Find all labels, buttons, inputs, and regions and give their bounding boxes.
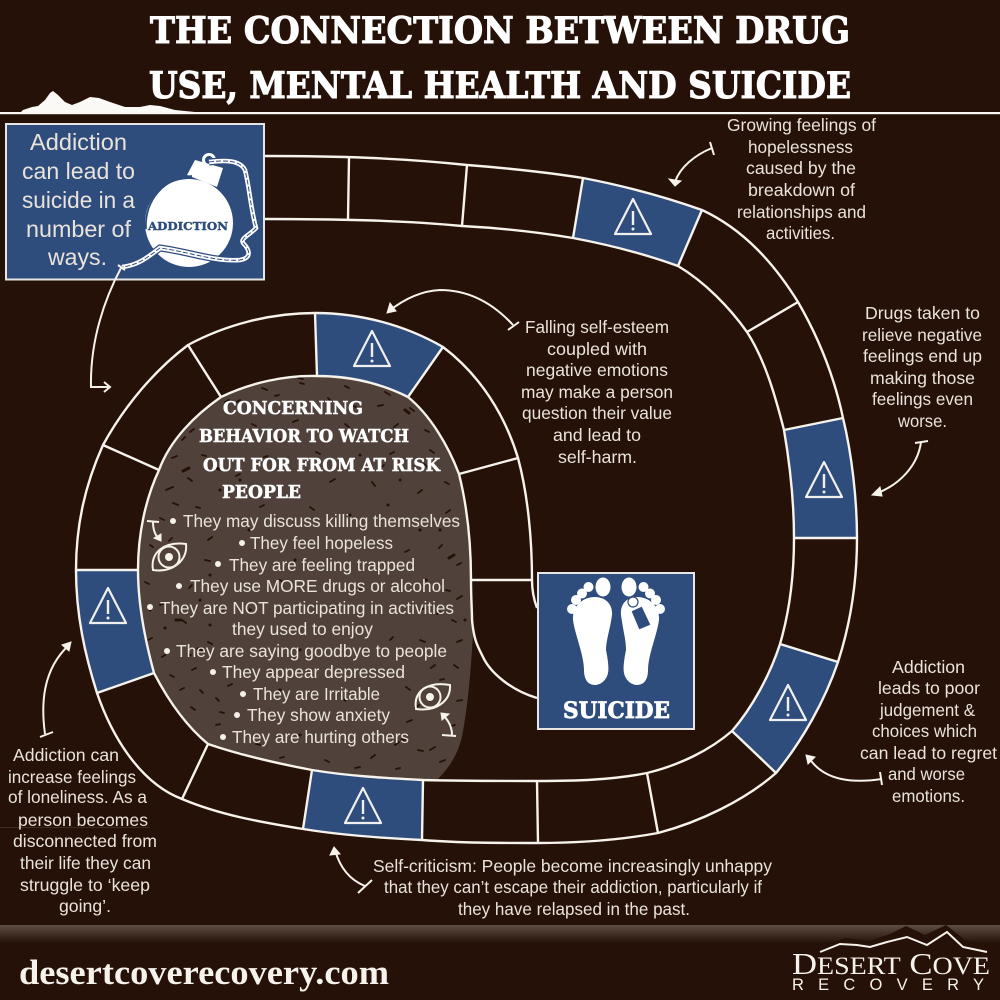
callout: loneliness: person becomes bbox=[18, 810, 148, 830]
icon: bomb with chain: ADDICTION bbox=[147, 220, 228, 233]
box text: number of bbox=[26, 216, 131, 242]
behavior list: They are hurting others bbox=[232, 727, 409, 747]
callout: poor judgement: can lead to regret bbox=[860, 743, 997, 763]
behavior list: They appear depressed bbox=[222, 662, 405, 682]
concerning behavior blob panel bbox=[138, 376, 473, 780]
board: warning squares bbox=[76, 178, 857, 840]
arrow: loneliness bbox=[40, 642, 71, 737]
callout: loneliness: of loneliness. As a bbox=[8, 787, 147, 807]
callout: self-esteem: may make a person bbox=[521, 382, 673, 402]
callout: self-esteem: coupled with bbox=[547, 339, 647, 359]
behavior list: They are Irritable bbox=[253, 684, 380, 704]
title: THE CONNECTION BETWEEN DRUG bbox=[150, 10, 850, 52]
callout: self-esteem: Falling self-esteem bbox=[525, 317, 669, 337]
icon: warning triangle 4 bbox=[345, 788, 381, 823]
logo: desert cove recovery: DESERT COVE bbox=[792, 946, 990, 981]
callout: poor judgement: emotions. bbox=[892, 786, 965, 806]
callout: loneliness bbox=[8, 745, 157, 916]
callout: loneliness: their life they can bbox=[20, 853, 151, 873]
icon: warning triangle 5 bbox=[90, 588, 126, 623]
panel: suicide box bbox=[538, 573, 694, 729]
logo: desert cove recovery: RECOVERY bbox=[792, 976, 984, 994]
arrow: self-criticism bbox=[330, 847, 372, 893]
behavior list: They feel hopeless bbox=[250, 533, 393, 553]
callout: loneliness: struggle to ‘keep bbox=[20, 875, 150, 895]
callout: drugs taken: feelings even bbox=[872, 389, 973, 409]
behavior list bbox=[147, 511, 460, 747]
header mountain rule bbox=[0, 91, 1000, 114]
callout: self-criticism bbox=[373, 856, 772, 919]
icon: bomb with chain bbox=[122, 154, 256, 267]
callout: hopelessness: caused by the bbox=[746, 158, 856, 178]
behavior list: they used to enjoy bbox=[232, 619, 373, 639]
blob heading: OUT FOR FROM AT RISK bbox=[203, 456, 441, 476]
blob heading bbox=[199, 399, 441, 503]
arrow: to left eye bbox=[147, 521, 161, 541]
callout: loneliness: going’. bbox=[59, 896, 111, 916]
title bbox=[149, 10, 851, 107]
box text: can lead to bbox=[22, 158, 135, 184]
behavior list: They may discuss killing themselves bbox=[183, 511, 460, 531]
board: winding track outline bbox=[76, 156, 857, 843]
callout: loneliness: increase feelings bbox=[8, 767, 136, 787]
callout: drugs taken: relieve negative bbox=[862, 325, 982, 345]
callout: hopelessness: hopelessness bbox=[748, 137, 853, 157]
callout: poor judgement: Addiction bbox=[892, 657, 965, 677]
blob heading: PEOPLE bbox=[222, 483, 301, 503]
box text bbox=[22, 129, 136, 270]
callout: hopelessness: activities. bbox=[766, 223, 835, 243]
behavior list: They are saying goodbye to people bbox=[176, 641, 447, 661]
logo: desert cove recovery bbox=[792, 932, 990, 994]
callout: self-esteem bbox=[521, 317, 673, 467]
box text: suicide in a bbox=[22, 187, 136, 213]
arrow: drugs taken bbox=[872, 441, 928, 496]
behavior list: They are NOT participating in activities bbox=[160, 598, 454, 618]
icon: left foot bbox=[567, 578, 612, 685]
callout: poor judgement: judgement & bbox=[879, 700, 975, 720]
arrow: to right eye bbox=[441, 713, 456, 736]
callout: poor judgement bbox=[860, 657, 997, 806]
behavior list: They show anxiety bbox=[247, 705, 390, 725]
callout: self-esteem: self-harm. bbox=[558, 447, 637, 467]
callout: hopelessness: relationships and bbox=[737, 202, 866, 222]
arrow: hopelessness bbox=[669, 142, 714, 186]
box text: ways. bbox=[47, 244, 107, 270]
website url: desertcoverecovery.com bbox=[19, 953, 389, 992]
arrow: box to track bbox=[91, 265, 125, 392]
callout: poor judgement: choices which bbox=[872, 721, 977, 741]
title: USE, MENTAL HEALTH AND SUICIDE bbox=[149, 65, 851, 107]
suicide label: SUICIDE bbox=[563, 698, 670, 724]
arrow: poor judgement bbox=[806, 755, 882, 785]
callout: self-criticism: Self-criticism: People become increasingly unhappy bbox=[373, 856, 772, 876]
behavior list: They are feeling trapped bbox=[229, 555, 415, 575]
callout: poor judgement: and worse bbox=[888, 764, 965, 784]
callout: drugs taken: making those bbox=[870, 368, 975, 388]
blob heading: BEHAVIOR TO WATCH bbox=[199, 427, 409, 447]
callout: poor judgement: leads to poor bbox=[878, 678, 980, 698]
callout: hopelessness: breakdown of bbox=[748, 180, 855, 200]
blob heading: CONCERNING bbox=[223, 399, 363, 419]
callout: drugs taken bbox=[862, 303, 982, 431]
footer band bbox=[0, 925, 1000, 955]
icon: warning triangle 2 bbox=[806, 462, 842, 497]
callout: loneliness: disconnected from bbox=[13, 831, 157, 851]
callout: hopelessness: Growing feelings of bbox=[727, 115, 876, 135]
icon: eye right bbox=[416, 684, 450, 709]
callout: drugs taken: worse. bbox=[897, 411, 947, 431]
callout: self-esteem: question their value bbox=[522, 403, 672, 423]
icon: right foot with tag bbox=[621, 578, 665, 685]
icon: eye left bbox=[153, 544, 186, 570]
callout: drugs taken: Drugs taken to bbox=[865, 303, 980, 323]
arrow: self-esteem bbox=[387, 290, 519, 330]
callout: drugs taken: feelings end up bbox=[863, 346, 982, 366]
callout: hopelessness bbox=[727, 115, 876, 243]
callout: self-criticism: that they can’t escape their addiction, particularly if bbox=[384, 877, 762, 897]
callout: self-criticism: they have relapsed in the past. bbox=[458, 899, 690, 919]
icon: warning triangle 3 bbox=[770, 685, 806, 720]
callout: self-esteem: negative emotions bbox=[526, 360, 668, 380]
panel: addiction start box bbox=[6, 124, 264, 280]
callout: self-esteem: and lead to bbox=[553, 425, 641, 445]
icon: warning triangle 6 bbox=[354, 331, 390, 366]
behavior list: They use MORE drugs or alcohol bbox=[190, 576, 445, 596]
callout: loneliness: Addiction can bbox=[13, 745, 119, 765]
icon: warning triangle 1 bbox=[615, 199, 651, 234]
box text: Addiction bbox=[30, 129, 127, 155]
